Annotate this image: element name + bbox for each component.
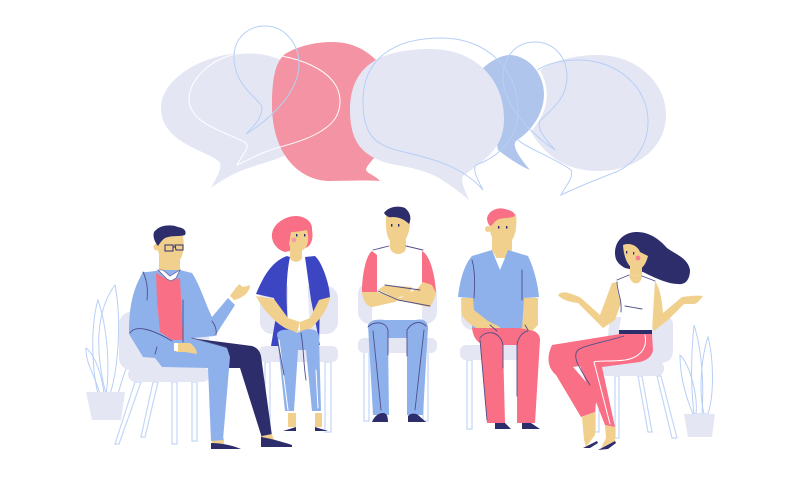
jacket xyxy=(256,256,330,346)
white shirt xyxy=(372,246,423,320)
white top xyxy=(617,275,655,330)
bubble: blue xyxy=(483,55,544,170)
neck xyxy=(290,245,302,262)
plant pot left xyxy=(86,392,125,420)
shirt xyxy=(458,250,539,328)
chair 5 xyxy=(595,317,677,438)
chair 2 xyxy=(259,286,338,432)
arms xyxy=(461,298,538,335)
glasses xyxy=(165,245,183,251)
chair 4 back xyxy=(461,290,537,330)
eyes xyxy=(626,251,634,254)
hair xyxy=(272,216,313,252)
jacket xyxy=(129,270,235,441)
sweater xyxy=(156,273,183,340)
shoes xyxy=(283,427,328,431)
arms xyxy=(558,281,703,331)
plant left xyxy=(86,285,128,420)
shoes xyxy=(211,437,292,449)
neck overlap xyxy=(629,275,642,283)
feet xyxy=(582,412,615,448)
chair 2 legs xyxy=(265,362,331,432)
v-neck xyxy=(495,258,505,269)
hair xyxy=(154,225,186,246)
jeans xyxy=(277,329,321,411)
chair 1 back xyxy=(119,312,209,370)
chair 1 legs xyxy=(115,382,197,444)
hand gesturing xyxy=(230,284,250,300)
bubble: right lavender xyxy=(531,55,666,171)
neck xyxy=(492,238,512,264)
hand on leg xyxy=(176,343,197,354)
bubble outline: center xyxy=(363,38,518,190)
trousers xyxy=(368,319,428,415)
neck xyxy=(390,238,406,254)
plant pot right xyxy=(684,414,715,437)
shirt neckline xyxy=(373,246,423,250)
chair 3 xyxy=(358,282,437,421)
bubble outline: blue left xyxy=(234,26,299,134)
jacket details xyxy=(130,272,226,354)
cheek xyxy=(636,256,640,260)
speech bubbles xyxy=(161,26,666,200)
shirt lines xyxy=(472,260,522,300)
bubble: left lavender xyxy=(161,53,286,188)
shoes xyxy=(583,441,616,450)
chair 5 seat xyxy=(600,361,664,376)
eyes xyxy=(498,226,507,229)
ankles xyxy=(212,434,274,445)
bubble outline: right xyxy=(518,60,648,195)
ankles xyxy=(288,413,322,427)
chair 5 legs xyxy=(595,376,677,438)
sleeves xyxy=(362,251,436,292)
person 1: man with glasses xyxy=(129,225,292,449)
hair xyxy=(615,232,690,284)
head xyxy=(490,214,516,245)
hand lines xyxy=(490,325,528,331)
neck xyxy=(159,255,180,280)
chair 4 legs xyxy=(467,360,472,429)
person 3: man with crossed arms xyxy=(362,207,436,422)
trouser lines xyxy=(480,331,528,420)
person 5: woman gesturing xyxy=(549,232,703,450)
shoes xyxy=(495,423,540,429)
eyes xyxy=(391,224,399,227)
plant right xyxy=(680,325,715,437)
trouser lines xyxy=(576,336,624,385)
arms xyxy=(256,296,330,333)
chair 1 xyxy=(115,312,210,444)
chair 3 legs xyxy=(364,352,428,421)
top lines xyxy=(617,275,655,312)
white gap under knee xyxy=(573,366,586,382)
person 4: man in scrubs xyxy=(458,208,540,429)
plant leaves left xyxy=(86,285,128,394)
chair 4 xyxy=(460,290,537,429)
trouser stripes xyxy=(594,335,646,424)
chair 1 seat xyxy=(128,367,210,382)
chair 5 back xyxy=(605,317,673,363)
jeans lines xyxy=(277,333,306,380)
ear xyxy=(154,244,160,250)
trousers xyxy=(472,328,540,423)
jeans highlights xyxy=(279,340,318,410)
eyes xyxy=(296,234,305,236)
face xyxy=(623,244,648,270)
face xyxy=(289,230,308,251)
dark trouser leg xyxy=(190,338,272,438)
person 2: woman with red hair xyxy=(256,216,330,431)
shoes xyxy=(372,413,426,422)
ear xyxy=(485,226,491,232)
trousers xyxy=(549,334,653,427)
hair xyxy=(384,207,410,224)
belt xyxy=(619,330,652,334)
chair 3 seat xyxy=(358,338,437,353)
arm lines xyxy=(378,285,430,306)
cuff xyxy=(174,343,178,351)
bubble: center lavender xyxy=(350,49,504,200)
white top xyxy=(288,256,310,330)
plant leaves right xyxy=(680,325,712,414)
head xyxy=(386,216,410,244)
trouser lines xyxy=(368,323,426,410)
chair 2 back xyxy=(260,286,338,334)
bubble outline: white over left xyxy=(189,53,340,165)
bubble outline: top right xyxy=(503,42,567,150)
hair xyxy=(487,208,515,226)
bubble: red xyxy=(272,42,385,181)
chair 4 seat xyxy=(460,345,520,360)
chair 3 back xyxy=(358,282,437,324)
neck xyxy=(630,262,642,283)
collar xyxy=(158,270,180,281)
chair 2 seat xyxy=(259,346,338,362)
face xyxy=(158,236,184,265)
cheek xyxy=(292,238,296,242)
crossed arms xyxy=(362,282,436,307)
